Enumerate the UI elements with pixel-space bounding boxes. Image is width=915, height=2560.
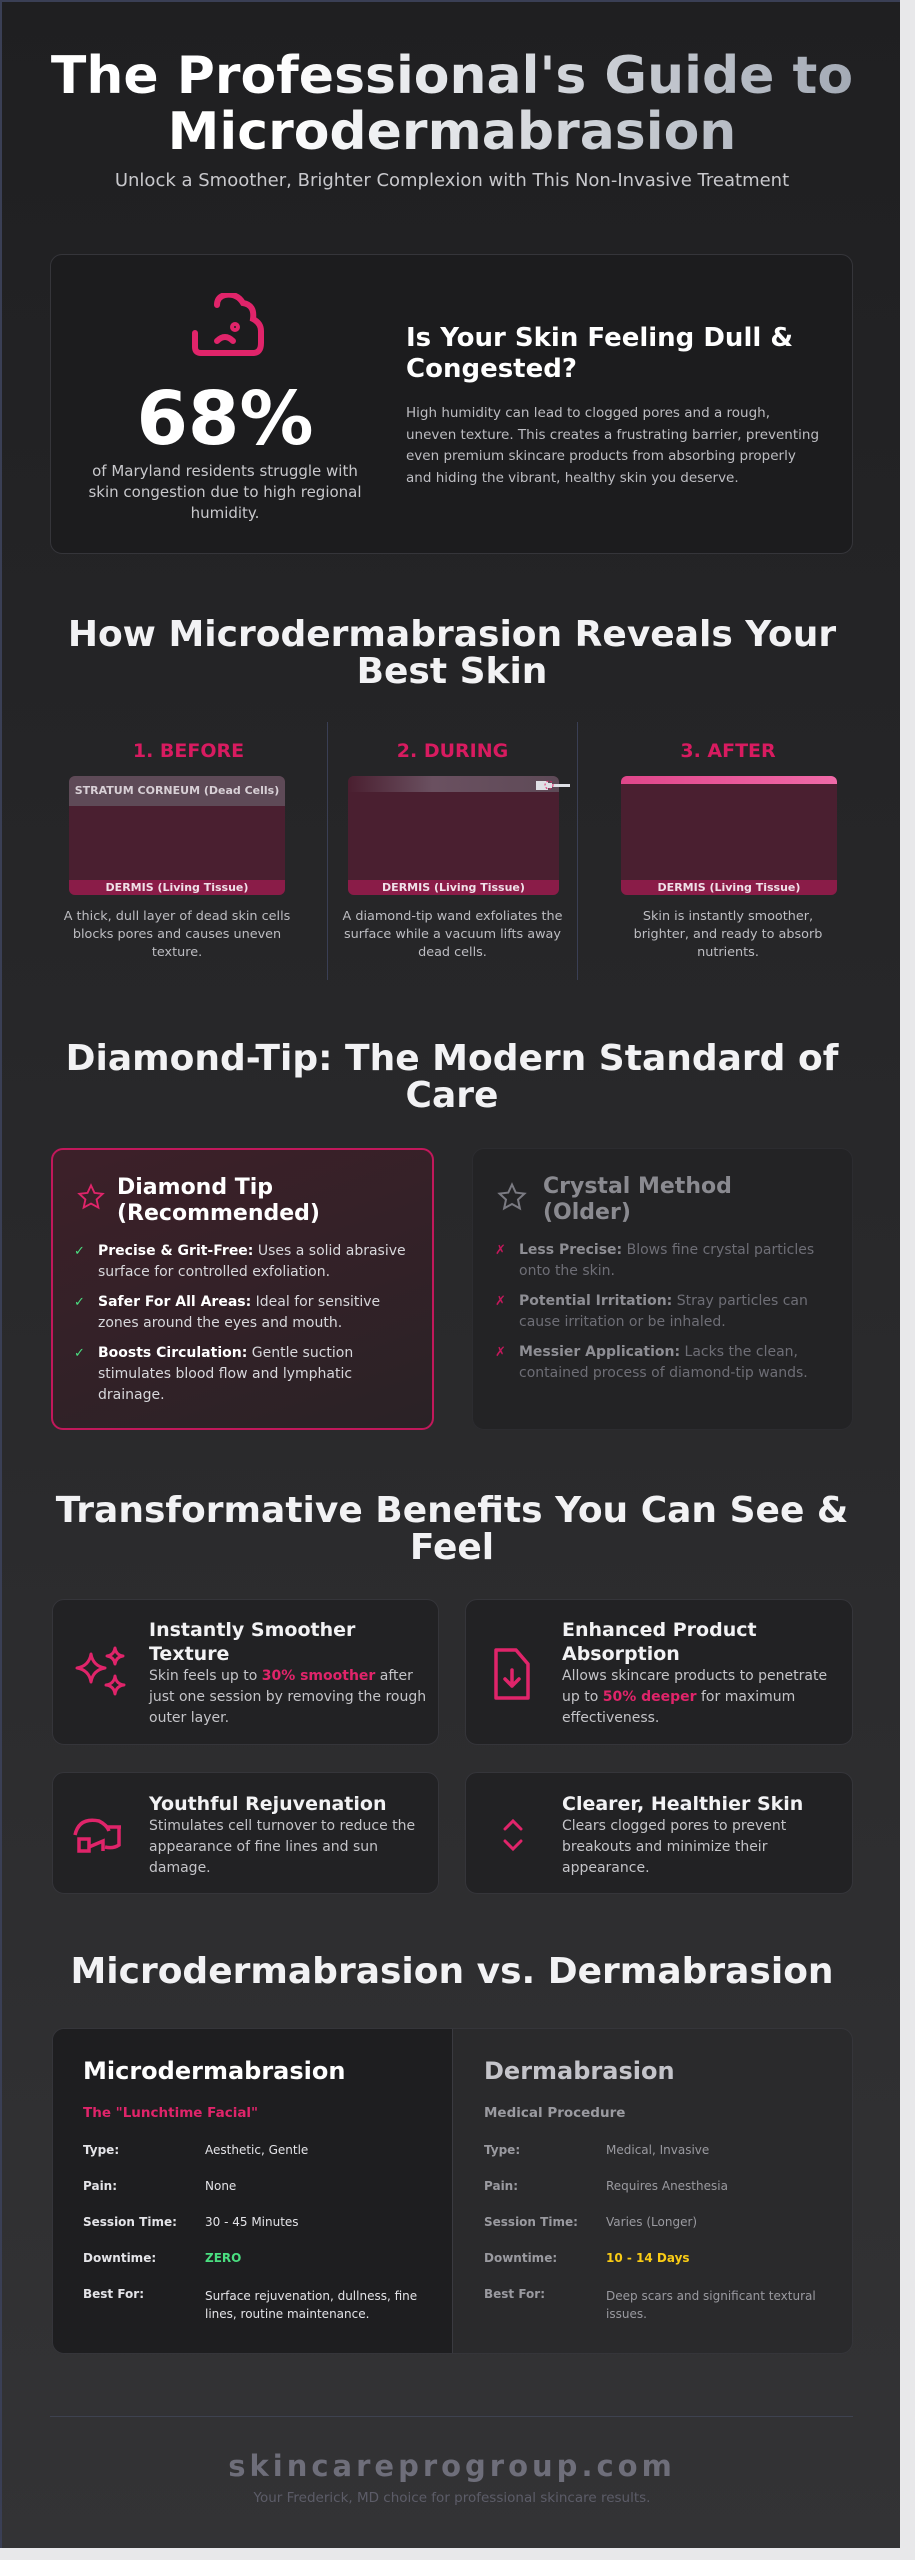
panel: benefit smoother: Skin feels up to 30% smoother after <box>149 1668 413 1684</box>
panel: during: 2. DURING <box>397 740 508 762</box>
comparison table <box>52 2028 853 2354</box>
heading: diamond tip <box>66 1038 839 1116</box>
list: zones around the eyes and mouth. <box>98 1315 342 1331</box>
heading: benefits: Feel <box>410 1527 494 1568</box>
list: ✗ <box>495 1243 506 1258</box>
panel: after: Skin is instantly smoother, brighter, and ready to absorb nutrients. <box>634 909 822 960</box>
column: dermabrasion: Dermabrasion <box>484 2057 675 2085</box>
skin diagram after: DERMIS (Living Tissue) <box>658 881 800 894</box>
list: ✓ <box>74 1295 85 1310</box>
list: Less Precise: Blows fine crystal particles <box>519 1242 814 1258</box>
skin diagram during with wand: DERMIS (Living Tissue) <box>382 881 525 894</box>
icon: cloud <box>192 293 264 356</box>
list: drainage. <box>98 1387 165 1403</box>
column: dermabrasion: 10 - 14 Days <box>606 2251 690 2265</box>
panel: benefit absorption: Enhanced Product <box>562 1619 757 1641</box>
heading: comparison: Microdermabrasion vs. Dermabrasion <box>70 1951 834 1992</box>
list: Precise & Grit-Free: Uses a solid abrasive <box>98 1243 406 1259</box>
heading: benefits <box>56 1490 848 1568</box>
panel: benefit rejuvenation: Stimulates cell turnover to reduce the <box>149 1818 415 1834</box>
list: ✓ <box>74 1346 85 1361</box>
panel: benefit absorption <box>465 1599 853 1745</box>
column: dermabrasion: Downtime: <box>484 2251 557 2265</box>
title: The Professional's Guide to <box>51 46 853 106</box>
list: stimulates blood flow and lymphatic <box>98 1366 352 1382</box>
icon: rejuvenation <box>73 1818 121 1853</box>
subtitle: Unlock a Smoother, Brighter Complexion with This Non-Invasive Treatment <box>115 170 789 191</box>
panel: diamond tip <box>51 1148 434 1430</box>
body text: High humidity can lead to clogged pores and a rough, <box>406 405 770 421</box>
column: dermabrasion: Requires Anesthesia <box>606 2179 728 2193</box>
list <box>74 1243 406 1403</box>
title: Microdermabrasion <box>168 102 736 162</box>
list: surface for controlled exfoliation. <box>98 1264 330 1280</box>
column: dermabrasion: Best For: <box>484 2287 545 2301</box>
panel: benefit smoother: just one session by removing the rough <box>149 1689 426 1705</box>
panel: benefit absorption: Allows skincare products to penetrate <box>562 1668 827 1684</box>
heading: benefits: Transformative Benefits You Can See & <box>56 1490 848 1531</box>
list: Safer For All Areas: Ideal for sensitive <box>98 1294 380 1310</box>
column: microdermabrasion: Type: <box>83 2143 119 2157</box>
column: microdermabrasion: Session Time: <box>83 2215 177 2229</box>
body text: even premium skincare products from absorbing properly <box>406 448 796 464</box>
heading: (Older) <box>543 1200 631 1225</box>
panel: benefit rejuvenation: damage. <box>149 1860 211 1876</box>
panel: benefit clearer: Clears clogged pores to prevent <box>562 1818 786 1834</box>
column: microdermabrasion: The "Lunchtime Facial" <box>83 2105 258 2121</box>
column: microdermabrasion: 30 - 45 Minutes <box>205 2215 299 2229</box>
icon: file download <box>494 1648 530 1700</box>
list: cause irritation or be inhaled. <box>519 1314 726 1330</box>
panel: benefit absorption: effectiveness. <box>562 1710 659 1726</box>
column: dermabrasion: Medical, Invasive <box>606 2143 709 2157</box>
heading: Crystal Method <box>543 1174 732 1199</box>
column: microdermabrasion: Aesthetic, Gentle <box>205 2143 308 2157</box>
column: dermabrasion: Varies (Longer) <box>606 2215 697 2229</box>
panel: benefit absorption: up to 50% deeper for maximum <box>562 1689 795 1705</box>
body text <box>406 405 819 486</box>
panel: benefit smoother: outer layer. <box>149 1710 229 1726</box>
body text: uneven texture. This creates a frustrating barrier, preventing <box>406 426 819 442</box>
panel: after <box>621 740 837 960</box>
panel: benefit rejuvenation: appearance of fine lines and sun <box>149 1839 378 1855</box>
list: contained process of diamond-tip wands. <box>519 1365 808 1381</box>
skin diagram before: STRATUM CORNEUM (Dead Cells) <box>75 784 279 797</box>
icon: sparkles <box>76 1646 126 1696</box>
list: ✗ <box>495 1294 506 1309</box>
panel: before: A thick, dull layer of dead skin cells blocks pores and causes uneven texture. <box>64 909 290 960</box>
skin diagram during with wand <box>348 776 559 895</box>
icon: star gray <box>497 1182 527 1210</box>
column: microdermabrasion: Best For: <box>83 2287 144 2301</box>
panel: after: 3. AFTER <box>680 740 776 762</box>
panel: benefit clearer <box>465 1772 853 1894</box>
list: Boosts Circulation: Gentle suction <box>98 1345 353 1361</box>
heading: how it works: How Microdermabrasion Reveals Your <box>68 614 836 655</box>
panel: benefit smoother: Texture <box>149 1643 229 1665</box>
list: Potential Irritation: Stray particles can <box>519 1293 808 1309</box>
list: ✓ <box>74 1244 85 1259</box>
column: microdermabrasion: Downtime: <box>83 2251 156 2265</box>
panel: benefit rejuvenation <box>52 1772 439 1894</box>
panel: benefit rejuvenation: Youthful Rejuvenation <box>149 1793 386 1815</box>
heading: dull & congested: Is Your Skin Feeling Dull & Congested? <box>406 323 793 384</box>
heading: diamond tip: Care <box>406 1075 498 1116</box>
list: ✗ <box>495 1345 506 1360</box>
skin diagram before <box>69 776 285 895</box>
list: Messier Application: Lacks the clean, <box>519 1344 798 1360</box>
column: dermabrasion: Medical Procedure <box>484 2105 625 2121</box>
column: microdermabrasion: None <box>205 2179 236 2193</box>
panel: during: A diamond-tip wand exfoliates the surface while a vacuum lifts away dead cells. <box>342 909 562 960</box>
heading <box>117 1175 320 1226</box>
list: onto the skin. <box>519 1263 615 1279</box>
heading: diamond tip: Diamond-Tip: The Modern Standard of <box>66 1038 838 1079</box>
title <box>2 48 902 160</box>
column: dermabrasion: Deep scars and significant textural issues. <box>606 2289 816 2321</box>
footer: tagline: Your Frederick, MD choice for professional skincare results. <box>254 2490 650 2506</box>
column: dermabrasion: Type: <box>484 2143 520 2157</box>
panel: before <box>64 740 290 960</box>
list <box>495 1242 814 1381</box>
heading: how it works <box>68 614 836 692</box>
heading: (Recommended) <box>117 1201 320 1226</box>
column: dermabrasion <box>484 2057 816 2321</box>
column: microdermabrasion: Microdermabrasion <box>83 2057 345 2085</box>
heading: how it works: Best Skin <box>357 651 547 692</box>
panel: benefit clearer: Clearer, Healthier Skin <box>562 1793 803 1815</box>
panel: benefit smoother <box>52 1599 439 1745</box>
footer: domain: skincareprogroup.com <box>228 2449 676 2483</box>
panel: before: 1. BEFORE <box>133 740 244 762</box>
column: microdermabrasion: Surface rejuvenation, dullness, fine lines, routine maintenance. <box>205 2289 417 2321</box>
panel: crystal method <box>472 1148 853 1430</box>
column: microdermabrasion: Pain: <box>83 2179 117 2193</box>
column: dermabrasion: Session Time: <box>484 2215 578 2229</box>
heading <box>543 1174 732 1225</box>
panel: benefit clearer: appearance. <box>562 1860 650 1876</box>
skin diagram before: DERMIS (Living Tissue) <box>106 881 248 894</box>
icon: chevrons <box>503 1819 522 1851</box>
column: microdermabrasion: ZERO <box>205 2251 241 2265</box>
panel: during <box>327 722 578 980</box>
column: dermabrasion: Pain: <box>484 2179 518 2193</box>
icon: star <box>77 1183 105 1210</box>
stat caption: of Maryland residents struggle with skin congestion due to high regional humidity. <box>88 462 362 522</box>
skin diagram after <box>621 776 837 895</box>
column: microdermabrasion <box>53 2029 453 2355</box>
panel: benefit absorption: Absorption <box>562 1643 680 1665</box>
heading: Diamond Tip <box>117 1175 273 1200</box>
panel: benefit clearer: breakouts and minimize their <box>562 1839 767 1855</box>
body text: and hiding the vibrant, healthy skin you deserve. <box>406 470 739 486</box>
stat 68%: 68% <box>136 376 314 462</box>
panel: skin congestion stat <box>50 254 853 554</box>
panel: benefit smoother: Instantly Smoother <box>149 1619 355 1641</box>
